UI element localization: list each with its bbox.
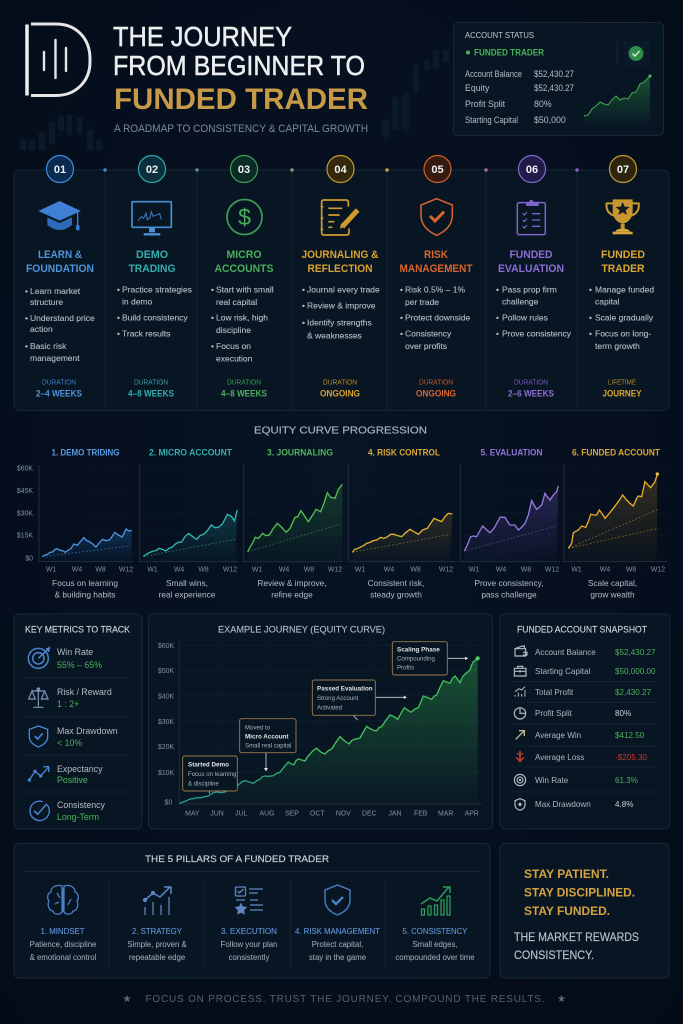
pillar: execution [221,887,277,962]
step 04: Journal every trade [307,284,380,294]
chart: 4 risk control: W12 [439,566,453,574]
step 01: Learn market [30,286,81,296]
chart: 3 journaling: Review & improve, [257,578,327,588]
step 02 [117,156,192,398]
step 02: • [117,312,120,322]
step 04: Review & improve [307,300,376,310]
metric: risk reward: 1 : 2+ [57,699,79,709]
step 04: DURATION [323,378,357,386]
panel: key metrics [14,614,142,829]
logo: D mark [27,24,90,96]
callout: started demo: Focus on learning [188,771,236,778]
heading: equity curve progression: EQUITY CURVE PROGRESSION [254,424,427,436]
step 02: Build consistency [122,312,188,322]
pillar: execution: 3. EXECUTION [221,927,277,936]
panel: funded account snapshot: FUNDED ACCOUNT SNAPSHOT [517,624,647,634]
step 04: Identify strengths [307,318,372,328]
step 06: 06 [526,164,538,176]
step 05: • [400,312,403,322]
step 07: Focus on long- [595,328,651,338]
chart: 3 journaling: W1 [252,566,262,574]
panel: stay funded callout: CONSISTENCY. [514,950,594,962]
step 07: • [589,328,592,338]
step 05: per trade [405,297,439,307]
snapshot rows: Starting Capital [535,667,591,676]
callout: passed evaluation [317,686,373,712]
pillar: strategy [127,887,187,962]
step 07: • [589,312,592,322]
step 02: 02 [146,164,158,176]
step 05: DURATION [419,378,453,386]
chart: 2 micro: real experience [159,590,216,600]
step 03: ACCOUNTS [214,263,274,275]
icon: dollar coin [227,200,262,234]
panel: example journey chart [148,614,492,829]
step 01: Basic risk [30,341,67,351]
callout: started demo: Started Demo [188,762,229,768]
panel: example journey chart: DEC [362,810,377,818]
metric: max drawdown: Max Drawdown [57,726,118,736]
step 01: LEARN & [38,249,82,261]
chart: 2 micro: 2. MICRO ACCOUNT [149,448,233,458]
step 05: Risk 0.5% – 1% [405,284,465,294]
snapshot rows: 4.8% [615,800,633,809]
step 03: • [211,341,214,351]
snapshot rows: Total Profit [535,688,574,697]
pillar: risk management [295,885,380,962]
snapshot rows: 80% [615,709,631,718]
panel: stay funded callout: STAY FUNDED. [524,906,610,918]
header [27,21,368,135]
chart: 2 micro: W12 [223,566,237,574]
step 06: 2–6 WEEKS [508,388,554,398]
chart: 6 funded account: grow wealth [590,590,635,600]
step 07: Scale gradually [595,312,654,322]
pillar: mindset: Patience, discipline [30,940,96,949]
step 04: JOURNALING & [302,249,379,261]
pillar: strategy: repeatable edge [129,953,185,962]
chart: 4 risk control: W8 [410,566,421,574]
y axis labels: $0 [25,556,33,562]
step 06: DURATION [514,378,548,386]
pillar: risk management: 4. RISK MANAGEMENT [295,927,380,936]
pillar: consistency: 5. CONSISTENCY [402,927,468,936]
step 04: • [302,318,305,328]
panel: account status: $52,430.27 [534,69,574,79]
icon: journal and pencil [321,200,358,235]
y axis labels: $30K [17,510,33,518]
snapshot rows: -$205.30 [615,753,647,762]
panel: stay funded callout: STAY DISCIPLINED. [524,888,635,900]
panel: roadmap stages [14,156,669,410]
step 03: 03 [238,164,250,176]
metric: consistency [30,800,106,822]
chart: 6 funded account: 6. FUNDED ACCOUNT [572,448,661,458]
step 04 [302,156,380,398]
panel: example journey chart: OCT [310,810,325,818]
snapshot rows: Average Loss [535,753,584,762]
panel: account status: $50,000 [534,115,566,125]
metric: consistency: Long-Term [57,812,99,822]
chart: 5 evaluation: W8 [521,566,531,574]
chart: 5 evaluation: W1 [469,566,479,574]
panel: account status: $52,430.27 [534,83,574,93]
step 06: • [496,312,499,322]
step 05: 05 [431,164,444,176]
panel: account status [454,22,664,136]
step 02: DEMO [136,249,168,261]
callout: moved to micro: Micro Account [245,734,289,740]
step 03: 4–8 WEEKS [221,388,267,398]
callout: passed evaluation: Passed Evaluation [317,686,373,692]
callout: scaling phase [397,646,440,672]
step 02: Practice strategies [122,284,192,294]
step 03: DURATION [227,378,261,386]
title: FUNDED TRADER [114,83,368,116]
panel: example journey chart: JUN [210,810,224,818]
panel: example journey chart: AUG [260,810,274,818]
panel: account status: FUNDED TRADER [474,48,545,58]
snapshot rows: $50,000.00 [615,667,656,676]
step 06: Prove consistency [502,328,572,338]
icon: clipboard checklist [517,200,545,235]
panel: account status: Profit Split [465,99,506,109]
chart: 6 funded account: Scale capital, [588,578,637,588]
pillar: strategy: Simple, proven & [127,940,187,949]
panel: example journey chart: $30K [158,719,174,726]
step 03: execution [216,354,253,364]
panel: example journey chart: MAR [438,810,453,818]
snapshot rows: Account Balance [535,648,596,657]
pillar: mindset [30,885,97,962]
chart: 4 risk control: 4. RISK CONTROL [368,448,441,458]
step 05: • [400,284,403,294]
footer tagline: ★ [557,994,566,1005]
step 06: Pollow rules [502,312,548,322]
panel: example journey chart: JUL [235,810,248,818]
metric: win rate: Win Rate [57,647,93,657]
step 06: Pass prop firm [502,284,557,294]
panel: example journey chart: $0 [164,800,172,806]
pillar: mindset: 1. MINDSET [40,927,85,936]
panel: account status: Starting Capital [465,115,518,125]
step 01: 2–4 WEEKS [36,388,82,398]
chart: 3 journaling [244,448,343,600]
step 03: • [211,312,214,322]
chart: 5 evaluation: 5. EVALUATION [480,448,542,458]
icon: dollar coin: $ [238,204,251,230]
callout: passed evaluation: Strong Account [317,695,359,702]
step 02: DURATION [134,378,168,386]
panel: example journey chart: NOV [336,810,351,818]
chart: 6 funded account: W4 [600,566,610,574]
pillar: consistency: compounded over time [395,953,475,962]
chart: 1 demo: 1. DEMO TRIDING [52,448,120,458]
panel: example journey chart: JAN [388,810,402,818]
step 05: MANAGEMENT [400,263,473,275]
panel: account status: Equity [465,83,490,93]
panel: example journey chart: $40K [158,694,174,700]
step 05 [400,156,473,398]
step 07: TRADER [602,263,645,275]
pillar: consistency: Small edges, [412,940,458,949]
step 05: over profits [405,341,447,351]
snapshot icons [514,646,527,810]
panel: stay funded callout: THE MARKET REWARDS [514,932,639,944]
snapshot rows: Max Drawdown [535,800,591,809]
step 07: capital [595,296,620,306]
step 02: • [117,284,120,294]
step 06: EVALUATION [498,263,564,275]
chart: 4 risk control: Consistent risk, [368,578,424,588]
panel: example journey chart: $50K [158,668,174,675]
step 07: 07 [617,164,629,176]
panel: key metrics: KEY METRICS TO TRACK [25,624,131,634]
icon: chart monitor [132,202,171,234]
step 06: challenge [502,296,539,306]
step 04: 04 [334,164,347,176]
chart: 4 risk control: steady growth [370,590,422,600]
background candlesticks [20,38,449,150]
step 02: 4–8 WEEKS [128,388,174,398]
chart: 1 demo: Focus on learning [52,578,118,588]
metric: expectancy [28,764,103,785]
step 07: LIFETIME [608,378,636,386]
chart: 1 demo: & building habits [55,590,115,600]
chart: 1 demo: W4 [72,566,82,574]
metric: risk reward [29,687,112,709]
panel: example journey chart: MAY [185,810,200,818]
step 03 [211,156,274,398]
step 03: discipline [216,325,251,335]
step 02: TRADING [128,263,176,275]
step 07: term growth [595,341,640,351]
y axis labels: $15K [17,532,33,540]
pillar: execution: Follow your plan [221,940,277,949]
panel: example journey chart: EXAMPLE JOURNEY (EQUITY CURVE) [218,624,385,636]
metric: win rate: 55% – 65% [57,660,102,670]
step 03: Start with small [216,284,274,294]
y axis labels: $45K [17,488,33,495]
chart: 4 risk control: W1 [355,566,365,574]
callout: scaling phase: Scaling Phase [397,646,440,654]
panel: account status: 80% [534,99,552,109]
step 02: • [117,328,120,338]
chart: 5 evaluation: W4 [496,566,506,574]
step 01: • [25,286,28,296]
icon: check badge [624,41,650,66]
step 02: in demo [122,296,153,306]
chart: 3 journaling: W8 [304,566,314,574]
step 07: Manage funded [595,284,654,294]
chart: 5 evaluation [460,448,560,600]
step 04: & weaknesses [307,330,362,340]
chart: 6 funded account: W12 [651,566,665,574]
callout: started demo: & discipline [188,780,219,788]
chart: 6 funded account: W1 [571,566,582,574]
chart: 1 demo: W1 [46,566,56,574]
step 05: Consistency [405,328,452,338]
panel: stay funded callout [500,844,669,978]
metric: max drawdown [29,726,118,748]
step 06: • [496,284,499,294]
step 01: • [25,313,28,323]
chart: 2 micro: W8 [198,566,209,574]
mini equity chart [584,74,652,124]
chart: 4 risk control: W4 [384,566,394,574]
chart: 6 funded account [564,448,667,600]
metric: consistency: Consistency [57,800,106,810]
chart: 1 demo: W8 [95,566,106,574]
callout: moved to micro: Moved to [245,724,271,732]
metric: expectancy: Expectancy [57,764,103,774]
step 01: management [30,353,80,363]
panel: example journey chart: APR [465,810,479,818]
step 07: FUNDED [601,249,645,261]
snapshot rows: $52,430.27 [615,648,656,657]
chart: 3 journaling: 3. JOURNALING [267,448,333,458]
arrows [209,658,466,793]
step 05: Protect downside [405,312,470,322]
panel: five pillars: THE 5 PILLARS OF A FUNDED TRADER [145,853,329,864]
step 01: FOUNDATION [26,263,94,275]
step 07: JOURNEY [602,388,642,398]
panel: account status: Account Balance [465,69,522,79]
panel: example journey chart: $10K [158,770,174,777]
title: FROM BEGINNER TO [113,50,365,81]
metric: max drawdown: < 10% [57,738,82,748]
step 01: 01 [54,164,66,176]
step 06: FUNDED [510,249,553,261]
subtitle: A ROADMAP TO CONSISTENCY & CAPITAL GROWTH [114,123,368,135]
step 06: • [496,328,499,338]
snapshot rows: $2,430.27 [615,688,652,697]
callout: scaling phase: Compounding [397,656,435,662]
y axis labels [17,466,33,562]
chart: 3 journaling: W4 [279,566,289,574]
icon: graduation cap [38,201,81,230]
step 04: ONGOING [320,388,360,398]
step 01: • [25,341,28,351]
callout: started demo [188,762,236,788]
step 05: • [400,328,403,338]
chart: 6 funded account: W8 [626,566,636,574]
panel: five pillars [14,844,490,978]
footer tagline: FOCUS ON PROCESS. TRUST THE JOURNEY. COMPOUND THE RESULTS. [146,994,544,1005]
chart: 5 evaluation: W12 [545,566,559,574]
pillar: mindset: & emotional control [30,953,97,962]
step 01: DURATION [42,378,76,386]
chart: 4 risk control [348,448,455,600]
step 01: structure [30,297,63,307]
metric: win rate [28,647,102,670]
panel: stay funded callout: STAY PATIENT. [524,869,609,881]
chart: 5 evaluation: pass challenge [481,590,537,600]
chart: 2 micro: W1 [147,566,158,574]
step 07 [589,156,654,398]
step 03: Low risk, high [216,312,268,322]
chart: 2 micro: Small wins, [166,578,208,588]
footer tagline: ★ [123,994,132,1005]
step 03: MICRO [226,249,262,261]
snapshot rows: Profit Split [535,709,573,718]
step 04: • [302,284,305,294]
chart: 5 evaluation: Prove consistency, [474,578,544,588]
icon: shield check [421,199,452,235]
snapshot rows: Win Rate [535,776,569,785]
panel: account status: ACCOUNT STATUS [465,30,534,40]
callout: scaling phase: Profits [397,664,414,672]
step 04: • [302,300,305,310]
step 01 [25,156,95,398]
panel: example journey chart: $20K [158,744,174,751]
metric: expectancy: Positive [57,775,88,785]
panel: funded account snapshot [500,614,670,829]
snapshot rows: 61.3% [615,776,638,785]
callout: moved to micro: Small real capital [245,742,291,750]
step 02: Track results [122,328,170,338]
callout boxes [183,642,447,791]
chart: 2 micro [140,448,238,600]
chart: 1 demo: W12 [119,566,133,574]
pillar: strategy: 2. STRATEGY [132,927,183,936]
step 05: RISK [424,249,448,261]
panel: example journey chart: SEP [285,810,299,818]
step 01: Understand price [30,313,95,323]
snapshot rows: $412.50 [615,731,645,740]
pillar: risk management: Protect capital, [312,940,363,949]
step 03: • [211,284,214,294]
metric: risk reward: Risk / Reward [57,687,112,697]
pillar: consistency [395,887,475,962]
chart: 1 demo [39,448,133,600]
step 03: real capital [216,297,257,307]
pillar: execution: consistently [229,953,269,962]
step 04: REFLECTION [308,263,373,275]
step 05: ONGOING [416,388,456,398]
pillar: risk management: stay in the game [309,953,366,962]
step 01: action [30,324,53,334]
step 03: Focus on [216,341,251,351]
icon: trophy [607,199,639,234]
snapshot rows [535,648,656,809]
title [113,21,368,116]
title: THE JOURNEY [113,21,292,52]
chart: 3 journaling: W12 [328,566,342,574]
snapshot rows: Average Win [535,731,581,740]
callout: passed evaluation: Activated [317,704,342,712]
step 06 [496,156,572,398]
y axis labels: $60K [17,466,33,472]
panel: example journey chart: $60K [158,643,174,650]
chart: 2 micro: W4 [174,566,184,574]
panel: example journey chart: FEB [414,810,428,818]
callout: moved to micro [245,724,291,750]
chart: 3 journaling: refine edge [271,590,313,600]
step 07: • [589,284,592,294]
